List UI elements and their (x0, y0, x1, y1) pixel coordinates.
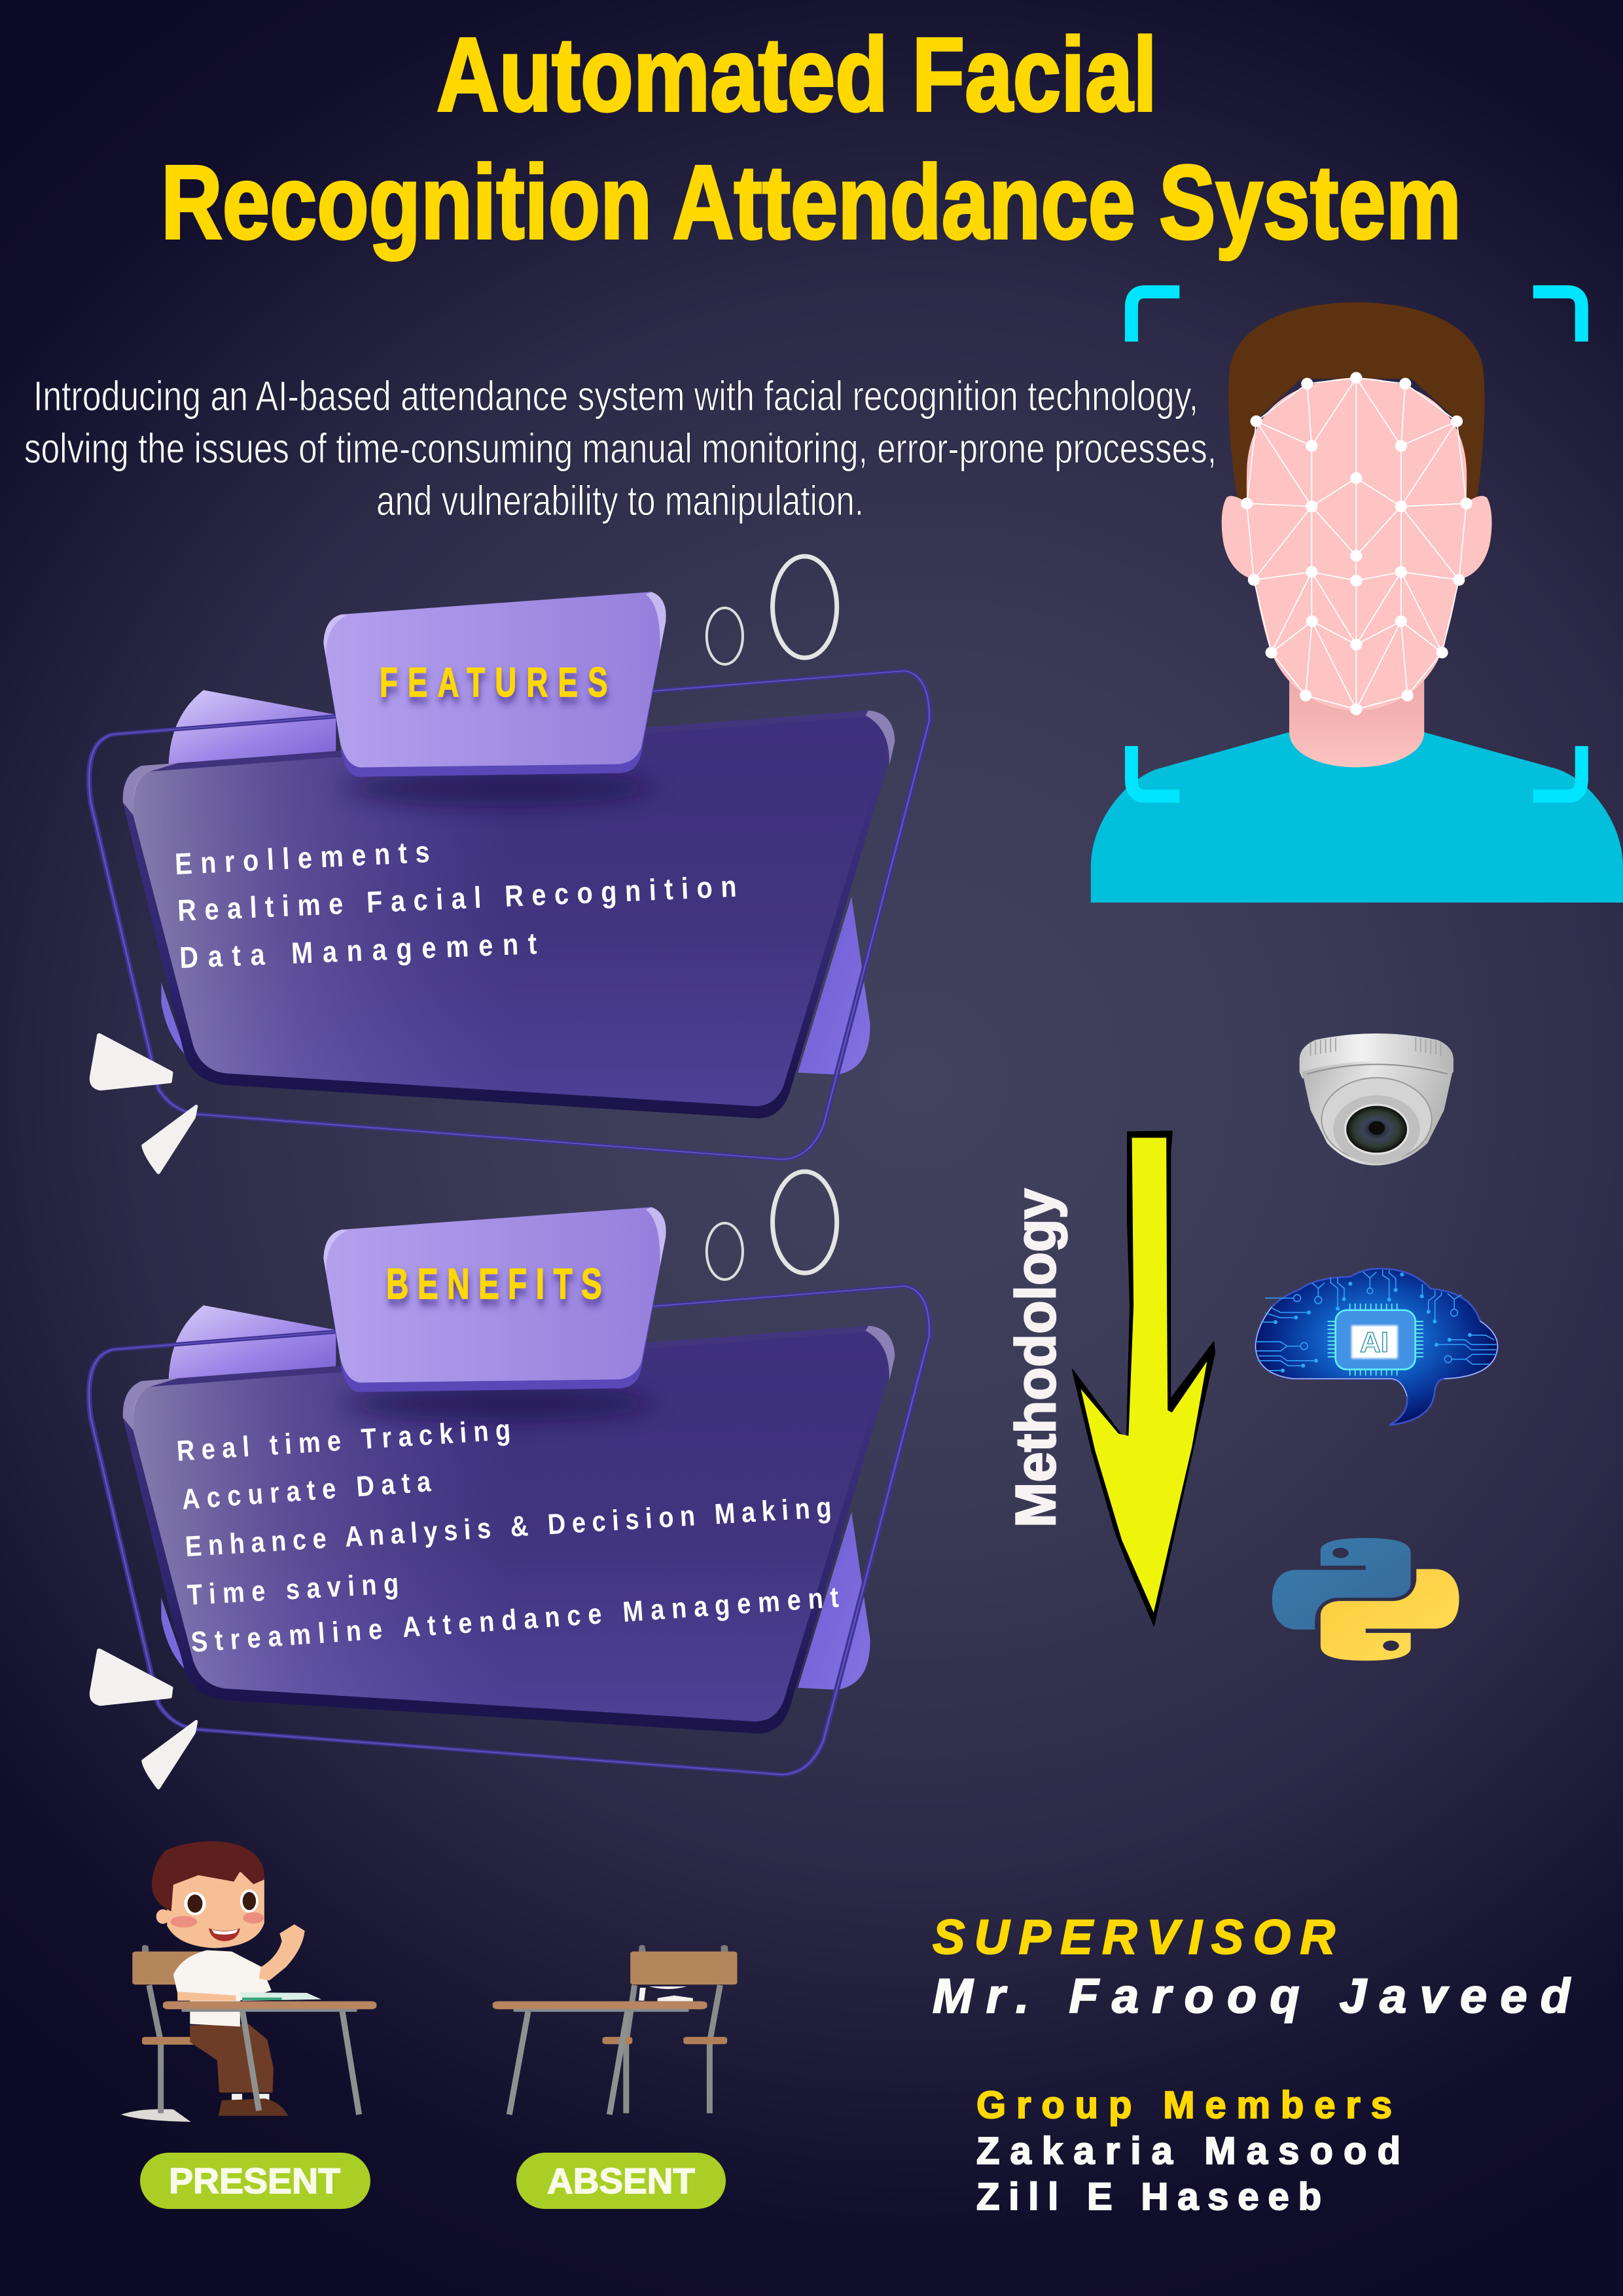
empty desk (493, 2001, 707, 2115)
badge: absent: ABSENT (547, 2161, 695, 2201)
group members block (976, 2084, 1400, 2218)
face scan illustration (1091, 292, 1623, 903)
icon: AI brain (1255, 1268, 1497, 1425)
benefits list: Streamline Attendance Management (190, 1581, 840, 1659)
student arm (259, 1924, 305, 1981)
circuit nodes (1274, 1272, 1472, 1372)
book (240, 1992, 321, 2001)
intro text: and vulnerability to manipulation. (376, 477, 864, 524)
icon: shirt (1091, 732, 1623, 903)
benefits list: Accurate Data (181, 1465, 433, 1516)
icon: face (1247, 378, 1467, 711)
features panel shapes (89, 556, 929, 1173)
chair (132, 1945, 207, 2113)
empty chair (602, 1945, 737, 2113)
illustration: empty desk (493, 1945, 737, 2115)
benefits list: Time saving (187, 1567, 399, 1611)
supervisor block: SUPERVISOR (933, 1910, 1335, 1964)
face mesh lines (1247, 378, 1467, 709)
benefits panel shapes (89, 1172, 929, 1788)
badge: present (140, 2153, 370, 2209)
title (161, 16, 1461, 260)
chip pins (1328, 1304, 1423, 1376)
intro text: solving the issues of time-consuming manual monitoring, error-prone processes, (24, 425, 1217, 472)
desk (163, 2001, 376, 2115)
group members block: Zakaria Masood (976, 2130, 1400, 2172)
benefits heading: BENEFITS (386, 1260, 602, 1308)
icon: security camera (1300, 1033, 1454, 1166)
supervisor block: Mr. Farooq Javeed (933, 1969, 1571, 2023)
badge: absent (516, 2153, 726, 2209)
intro text: Introducing an AI-based attendance system with facial recognition technology, (33, 372, 1198, 420)
chip (1336, 1310, 1416, 1369)
panel: features (89, 556, 929, 1173)
icon: hair (1228, 302, 1484, 502)
floor shadow (121, 2109, 191, 2122)
illustration: present student at desk (121, 1841, 376, 2122)
features list (174, 835, 737, 975)
methodology label: Methodology (1005, 1189, 1067, 1528)
icon: neck (1289, 675, 1424, 767)
badge: present: PRESENT (169, 2161, 340, 2201)
panel: benefits (89, 1172, 929, 1788)
supervisor block (933, 1910, 1571, 2023)
arrow: methodology flow (1073, 1132, 1215, 1625)
circuit traces (1257, 1270, 1497, 1371)
scan brackets (1132, 292, 1582, 796)
icon: python logo (1272, 1538, 1459, 1660)
student legs (190, 2024, 274, 2092)
features list: Data Management (179, 927, 537, 975)
title: Automated Facial (437, 16, 1157, 133)
benefits list (175, 1413, 840, 1659)
benefits list: Enhance Analysis & Decision Making (185, 1491, 832, 1563)
student head (152, 1841, 264, 1948)
student shirt (173, 1950, 272, 2026)
AI chip label: AI (1360, 1327, 1389, 1359)
intro text (24, 372, 1217, 524)
features list: Enrollements (174, 835, 431, 882)
group members block: Group Members (976, 2084, 1392, 2126)
benefits list: Real time Tracking (175, 1413, 511, 1467)
face mesh nodes (1241, 372, 1472, 715)
features list: Realtime Facial Recognition (177, 870, 737, 928)
group members block: Zill E Haseeb (976, 2176, 1321, 2218)
icon: ears (1222, 496, 1492, 580)
features heading: FEATURES (380, 659, 607, 706)
